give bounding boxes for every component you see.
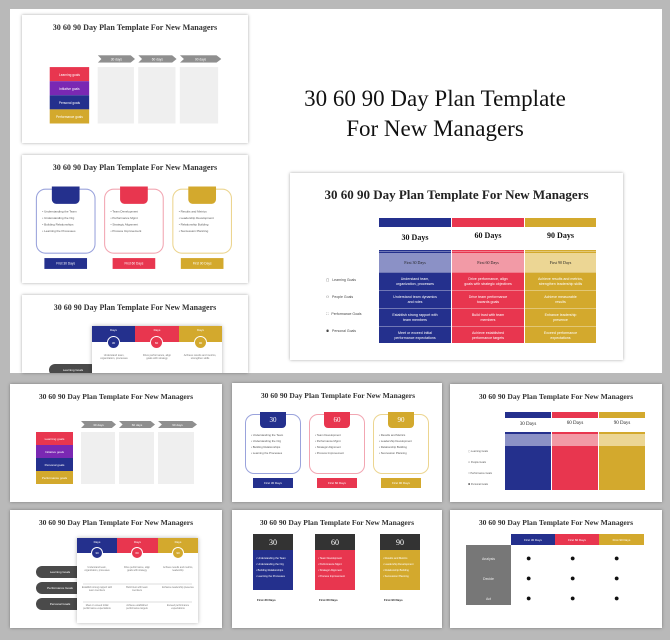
card: 90: • Results and Metrics [379, 433, 405, 437]
slide title: 30 60 90 Day Plan Template For New Managers [39, 392, 193, 401]
column: 60 days: Build trust with team [472, 313, 504, 317]
headers: 30 Days [520, 422, 536, 427]
column: 90 days: presence [553, 318, 568, 322]
column: 30 days: and roles [408, 300, 422, 304]
left labels block: Decide [483, 577, 494, 581]
card: 30: First 30 Days [56, 261, 75, 266]
column: 90: • Results and Metrics [383, 557, 407, 560]
card: 60: First 60 Days [125, 261, 143, 266]
column: 60: • Performance Mgmt [318, 563, 342, 566]
days card: Enhance leadership presence [162, 586, 194, 589]
chevrons and cells: 30 days [93, 422, 104, 426]
card: 90: First 90 Days [392, 481, 410, 485]
days card: Achieve established performance targets [126, 604, 148, 610]
days card: Days [175, 540, 181, 544]
card: 60: • Performance Mgmt [315, 439, 341, 443]
days card: Achieve results and metrics, leadership [163, 566, 193, 572]
row labels: ⚉ Personal Goals [468, 483, 488, 486]
column: 30 days: performance expectations [394, 336, 436, 340]
row labels [326, 278, 362, 333]
check icons: ● [614, 573, 619, 583]
column: 60: • Process Improvement [318, 575, 345, 578]
column: 30 days: Establish strong rapport with [392, 313, 438, 317]
slide: checkmark matrix (bottom): First 90 Days [613, 538, 630, 542]
column: 60 days: performance targets [472, 336, 504, 340]
slide: rounded cards (bottom) [232, 383, 442, 502]
column: 90: • Succession Planning [383, 575, 409, 578]
column headers: 60 Days [475, 231, 501, 240]
days card: Establish strong rapport with team members [82, 586, 112, 592]
goals stack [50, 67, 90, 124]
column: 60 days: towards goals [477, 300, 499, 304]
days card: Days [197, 328, 204, 332]
days card: Drive performance, align goals with strategy [124, 566, 150, 572]
days card: Exceed performance expectations [167, 604, 189, 610]
column: 30: 30 [269, 538, 277, 546]
days card: 60 [155, 340, 158, 344]
chevrons and cells [81, 421, 197, 484]
card: 60: • Team Development [315, 433, 341, 437]
card: 30: 30 [270, 416, 276, 424]
pill: learning goals [49, 364, 97, 376]
card: 90: • Results and Metrics [179, 209, 207, 214]
pill: learning goals: Learning Goals [63, 368, 83, 372]
slide: chevron goals (top) [22, 15, 248, 143]
column: 90 days: Exceed performance [544, 331, 577, 335]
column: 60 [315, 534, 355, 602]
column: 90: First 90 Days [384, 598, 403, 602]
headers: 90 Days [614, 421, 630, 426]
goals stack: Personal goals [45, 462, 64, 466]
days card [92, 326, 222, 386]
card: 90: • Leadership Development [179, 216, 214, 220]
chevrons and cells: 90 days [195, 57, 206, 61]
column: 60 days: First 60 Days [477, 260, 499, 265]
column headers: 30 Days [402, 233, 428, 242]
goals stack: Performance goals [42, 476, 67, 480]
column: 60: First 60 Days [319, 598, 338, 602]
header bars: First 30 Days [524, 538, 542, 542]
column: 90 [380, 534, 420, 602]
slide title: 30 60 90 Day Plan Template For New Managers [261, 391, 415, 400]
headers [520, 420, 630, 427]
card: 90: • Succession Planning [379, 451, 407, 455]
row labels: ▢ Learning Goals [468, 450, 488, 453]
card: 90: • Relationship Building [179, 222, 208, 227]
slide: chevron goals (bottom) [10, 384, 222, 502]
column: 90: 90 [396, 538, 404, 546]
card: 60: • Performance Mgmt [110, 216, 138, 220]
column: 30: • Learning the Processes [256, 575, 285, 578]
colour bars [505, 412, 551, 418]
days card: 90 [199, 340, 202, 344]
card: 30: • Understanding the Team [251, 433, 283, 437]
days card: Days [110, 328, 117, 332]
card: 30: • Learning the Processes [251, 451, 282, 455]
column: 90 days: results [555, 300, 566, 304]
card: 30: • Understanding the Org [42, 216, 74, 220]
pills [36, 566, 77, 610]
column: 30: • Understanding the Team [256, 557, 286, 560]
card: 90 [373, 412, 429, 488]
column: 90 days: strengthen leadership skills [539, 282, 582, 286]
column headers [402, 231, 574, 242]
column: 90 days: Enhance leadership [545, 313, 576, 317]
slide title: 30 60 90 Day Plan Template For New Managers [53, 163, 217, 172]
goals stack: Initiative goals [59, 86, 80, 90]
card: 60: 60 [334, 416, 340, 424]
days card: Achieve results and metrics, strengthen skills [184, 354, 216, 360]
row labels: ⚉ Personal Goals [326, 329, 356, 333]
slide title: 30 60 90 Day Plan Template For New Managers [479, 392, 633, 401]
table block [505, 432, 645, 490]
column: 90 days: Achieve measurable [544, 295, 577, 299]
days card: Meet or exceed initial performance expectations [83, 604, 111, 610]
days card: Days [154, 328, 160, 332]
card: 90: • Leadership Development [379, 439, 412, 443]
card: 30: • Building Relationships [42, 222, 73, 227]
check icons: ● [570, 593, 575, 603]
row labels: ⛶ Performance Goals [326, 312, 362, 316]
row labels: ⛶ Performance Goals [468, 472, 492, 475]
column: 60 days: Drive team performance [469, 295, 507, 299]
slide title: 30 60 90 Day Plan Template For New Managers [39, 518, 193, 527]
column: 60 days: Drive performance, align [468, 277, 508, 281]
column: 30 days: team members [403, 318, 427, 322]
goals stack: Initiative goals [45, 450, 64, 454]
goals stack: Personal goals [59, 100, 80, 105]
column: 30: • Building Relationships [256, 569, 283, 572]
slide: checkmark matrix (bottom) [450, 510, 662, 628]
left labels block: Analysis [482, 557, 495, 561]
column: 30 days: Understand team, [401, 277, 429, 281]
goals stack: Learning goals [59, 72, 80, 76]
top colour bars [379, 218, 451, 227]
column: 30 [253, 534, 293, 602]
card: 30: First 30 Days [264, 481, 282, 485]
card: 90 [172, 186, 232, 269]
days card: Days [94, 540, 100, 544]
slide: days table (top, cropped) [22, 295, 248, 373]
days card: 30 [112, 340, 115, 344]
column: 30: • Understanding the Org [256, 563, 284, 566]
goals stack: Performance goals [56, 114, 83, 119]
column: 90 days: expectations [550, 336, 571, 340]
pills: Performance Goals [47, 586, 73, 590]
days card [77, 538, 198, 623]
slide title: 30 60 90 Day Plan Template For New Managers [324, 187, 589, 202]
row labels: ▢ Learning Goals [326, 278, 356, 282]
check icons: ● [570, 573, 575, 583]
card: 60: • Strategic Alignment [110, 222, 138, 227]
column: 90 days: Achieve results and metrics, [538, 277, 583, 281]
card: 60 [104, 186, 164, 269]
column: 90 days: First 90 Days [550, 260, 571, 265]
check icons: ● [526, 593, 531, 603]
check icons: ● [570, 553, 575, 563]
slide: checkmark matrix (bottom): First 60 Days [568, 538, 586, 542]
column: 60: • Team Development [318, 557, 342, 560]
main title: For New Managers [346, 116, 524, 141]
card: 90: • Relationship Building [379, 445, 407, 449]
card: 30: • Understanding the Team [42, 209, 77, 214]
slide: days table with pills (bottom) [10, 510, 222, 628]
check icons: ● [526, 573, 531, 583]
slide title: 30 60 90 Day Plan Template For New Managers [479, 518, 633, 527]
slide title: 30 60 90 Day Plan Template For New Managers [54, 303, 216, 312]
column: 90: • Leadership Development [383, 563, 413, 566]
chevrons and cells: 30 days [111, 57, 122, 61]
days card: Days [134, 540, 141, 544]
days card: 30 [95, 551, 99, 555]
slide: goals table (bottom) [450, 384, 662, 502]
header bars [511, 534, 555, 545]
column: 60 days: goals with strategic objectives [464, 282, 512, 286]
card: 90: First 90 Days [193, 261, 212, 266]
row labels: ⚇ People Goals [468, 461, 486, 464]
check icons [526, 553, 619, 603]
card: 30: • Learning the Processes [42, 229, 75, 233]
left labels block [466, 545, 511, 605]
days card: Understand team, organization, processes [84, 566, 110, 572]
column: 30 days: Meet or exceed initial [398, 331, 432, 335]
left labels block: Act [486, 597, 491, 601]
column: 90: • Relationship Building [383, 569, 409, 572]
card: 30 [36, 186, 96, 269]
check icons: ● [614, 553, 619, 563]
card: 90: 90 [398, 416, 404, 424]
card: 60: • Strategic Alignment [315, 445, 341, 449]
pills: Learning Goals [50, 570, 70, 574]
slide: 30 60 90 columns (bottom) [232, 510, 442, 628]
column: 30 days: organization, processes [396, 282, 434, 286]
chevrons and cells [98, 55, 221, 124]
goals stack: Learning goals [45, 436, 64, 440]
column: 60 days [452, 250, 524, 343]
days card: Build trust with team members [126, 586, 148, 592]
card: 60: • Team Development [110, 209, 138, 214]
card: 30: • Understanding the Org [251, 439, 281, 443]
column: 90 days [525, 250, 596, 343]
column: 60 days: Achieve established [472, 331, 504, 335]
card: 60: First 60 Days [328, 481, 346, 485]
days card: Drive performance, align goals with strategy [143, 354, 171, 360]
column headers: 90 Days [547, 231, 574, 240]
check icons: ● [526, 553, 531, 563]
card: 60: • Process Improvement [315, 451, 344, 455]
headers: 60 Days [567, 421, 583, 426]
column: 60: 60 [331, 538, 339, 546]
card: 60 [309, 412, 365, 488]
days card: Understand team, organization, processes [100, 354, 128, 360]
column: 30 days: Understand team dynamics [393, 295, 437, 299]
days card: 90 [176, 551, 180, 555]
column: 30 days: First 30 Days [404, 260, 426, 265]
slide title: 30 60 90 Day Plan Template For New Managers [260, 518, 414, 527]
top panel [10, 9, 662, 373]
card: 90: • Succession Planning [179, 229, 208, 233]
column: 60: • Strategic Alignment [318, 569, 342, 572]
card: 60: • Process Improvement [110, 229, 141, 233]
chevrons and cells: 90 days [172, 422, 183, 426]
card: 30 [245, 412, 301, 488]
check icons: ● [614, 593, 619, 603]
slide: big goals table [290, 173, 623, 360]
column: 60 days: members [480, 318, 495, 322]
slide: rounded cards (top) [22, 155, 248, 283]
chevrons and cells: 60 days [132, 422, 142, 426]
row labels: ⚇ People Goals [326, 295, 353, 299]
card: 30: • Building Relationships [251, 445, 280, 449]
pills: Personal Goals [50, 602, 70, 606]
days card: 60 [135, 551, 139, 555]
column: 30: First 30 Days [257, 598, 276, 602]
main title: 30 60 90 Day Plan Template [304, 86, 566, 111]
goals stack [36, 432, 73, 484]
row labels [468, 450, 492, 486]
column: 30 days [379, 250, 451, 343]
chevrons and cells: 60 days [152, 57, 163, 61]
main title [304, 86, 566, 141]
slide title: 30 60 90 Day Plan Template For New Managers [53, 23, 217, 32]
